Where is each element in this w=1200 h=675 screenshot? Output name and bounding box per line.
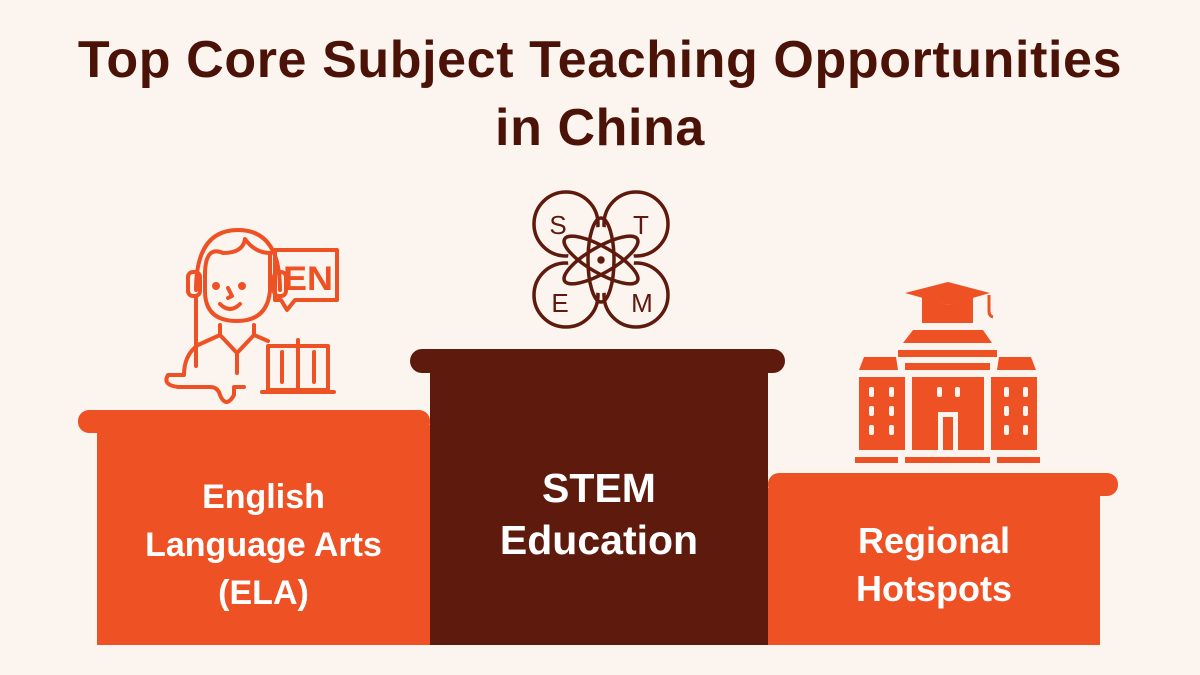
title — [78, 31, 1122, 157]
icon: STEM: M — [631, 288, 653, 318]
label: Regional: Hotspots — [856, 568, 1012, 609]
icon: STEM: E — [551, 288, 569, 318]
podium: center STEM — [410, 349, 785, 645]
label: ELA: (ELA) — [218, 574, 309, 612]
label: Regional — [856, 520, 1012, 609]
label: STEM: STEM — [542, 465, 656, 511]
icon: STEM — [534, 192, 668, 327]
icon: English teacher: EN — [283, 260, 333, 298]
icon: STEM: S — [549, 210, 567, 240]
icon: STEM: T — [633, 210, 649, 240]
label: ELA: English — [202, 478, 325, 516]
icon: English teacher — [166, 230, 337, 402]
label: STEM — [500, 465, 698, 563]
podium: right regional — [768, 473, 1118, 645]
title: in China — [495, 99, 705, 157]
label: Regional: Regional — [858, 520, 1010, 561]
label: ELA — [145, 478, 382, 612]
podium: left ELA — [78, 410, 430, 645]
title: Top Core Subject Teaching Opportunities — [78, 31, 1122, 89]
label: ELA: Language Arts — [145, 526, 382, 564]
icon: university building — [855, 282, 1040, 463]
label: STEM: Education — [500, 517, 698, 563]
